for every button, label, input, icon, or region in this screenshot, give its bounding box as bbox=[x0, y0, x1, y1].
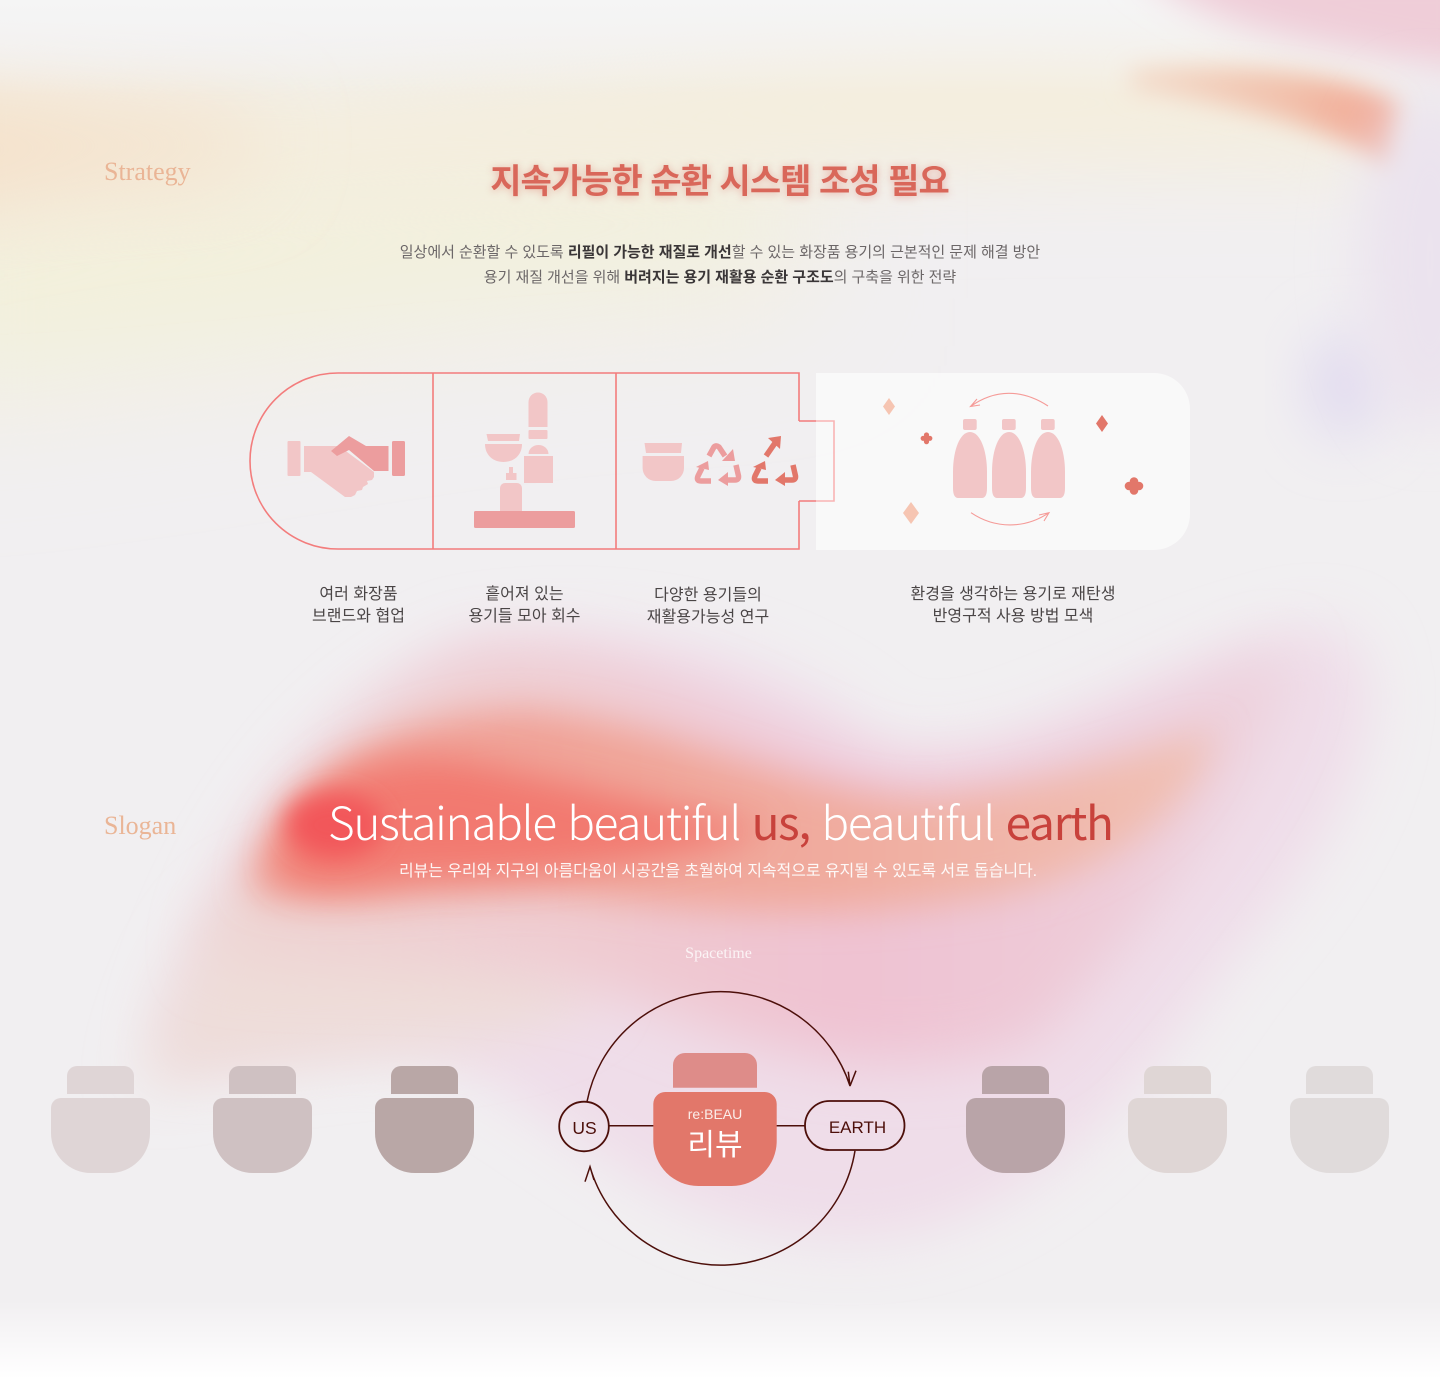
icon: recycle light bbox=[696, 446, 739, 486]
intro text: 용기 재질 개선을 위해 버려지는 용기 재활용 순환 구조도의 구축을 위한 전략 bbox=[484, 269, 956, 286]
node: US: US bbox=[572, 1118, 597, 1138]
step label 1 bbox=[312, 586, 405, 625]
jar 6 bbox=[1290, 1066, 1389, 1173]
step label 2 bbox=[468, 585, 581, 625]
step label 3: 다양한 용기들의 bbox=[654, 587, 762, 604]
cycle arrows bbox=[585, 992, 856, 1265]
arrows: refill loop bbox=[970, 393, 1049, 525]
icon: refill bottles bbox=[953, 419, 1065, 498]
icon: scattered containers bbox=[474, 392, 575, 528]
icon: jar bbox=[643, 443, 684, 481]
label: Slogan: Slogan bbox=[104, 811, 176, 840]
step label 1: 브랜드와 협업 bbox=[312, 608, 405, 625]
icon: recycle dark bbox=[753, 436, 796, 486]
intro text bbox=[400, 244, 1040, 286]
step label 4 bbox=[910, 586, 1116, 625]
label: Spacetime: Spacetime bbox=[685, 945, 752, 962]
slogan: Sustainable beautiful us, beautiful earth bbox=[328, 788, 1113, 854]
brand jar: re:BEAU bbox=[688, 1106, 742, 1122]
slogan subtitle: 리뷰는 우리와 지구의 아름다움이 시공간을 초월하여 지속적으로 유지될 수 있도록 서로 돕습니다. bbox=[399, 863, 1037, 880]
jar 4 bbox=[966, 1066, 1065, 1173]
brand jar: 리뷰 bbox=[687, 1129, 743, 1162]
step label 1: 여러 화장품 bbox=[319, 586, 398, 603]
step label 3 bbox=[647, 586, 769, 626]
node: EARTH: EARTH bbox=[829, 1118, 886, 1137]
icon: handshake bbox=[288, 436, 405, 497]
panel: result white card bbox=[816, 373, 1190, 550]
icon: sparkles bbox=[883, 398, 1143, 524]
step label 4: 환경을 생각하는 용기로 재탄생 bbox=[910, 586, 1116, 603]
panel: outlined steps bbox=[250, 373, 834, 549]
step label 2: 흩어져 있는 bbox=[485, 586, 564, 603]
jar 5 bbox=[1128, 1066, 1227, 1173]
step label 2: 용기들 모아 회수 bbox=[468, 608, 581, 625]
brand jar bbox=[653, 1053, 777, 1186]
jar 3 bbox=[375, 1066, 474, 1173]
step label 3: 재활용가능성 연구 bbox=[647, 609, 769, 626]
jar 2 bbox=[213, 1066, 312, 1173]
jar 1 bbox=[51, 1066, 150, 1173]
intro text: 일상에서 순환할 수 있도록 리필이 가능한 재질로 개선할 수 있는 화장품 용기의 근본적인 문제 해결 방안 bbox=[400, 244, 1040, 261]
step label 4: 반영구적 사용 방법 모색 bbox=[933, 608, 1093, 625]
label: Strategy: Strategy bbox=[104, 157, 191, 186]
node: EARTH bbox=[805, 1101, 904, 1150]
node: US bbox=[559, 1102, 609, 1151]
heading: 지속가능한 순환 시스템 조성 필요 bbox=[490, 163, 949, 201]
